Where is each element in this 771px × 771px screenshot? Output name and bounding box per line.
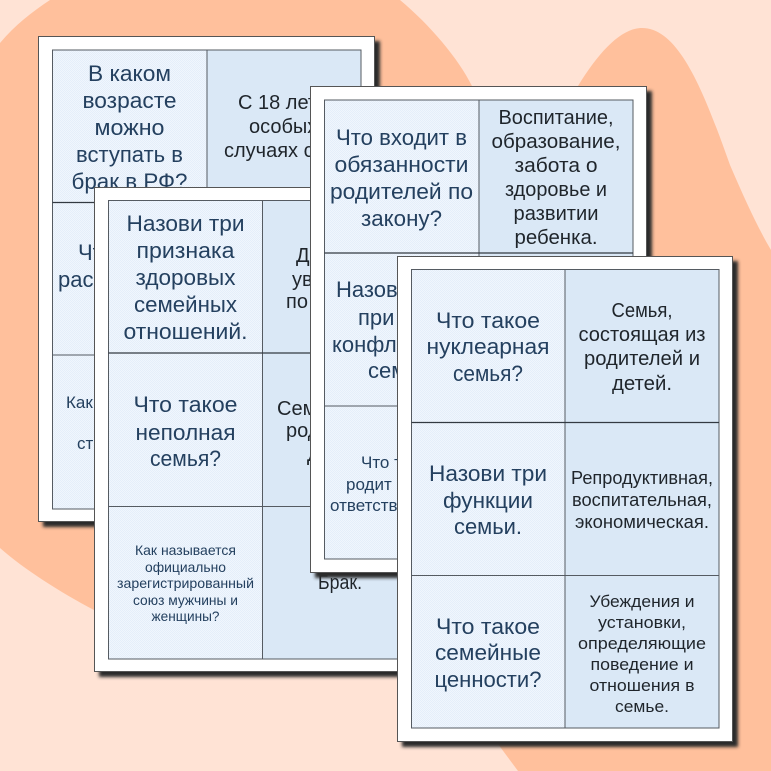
answer: family values [578,592,706,716]
answer: single-parent family: род [286,420,320,442]
question: parental duties: закону? [361,206,442,231]
answer: three signs: Д [296,245,310,267]
answer: parental duties: ребенка. [514,227,598,249]
question: family functions: семьи. [454,514,522,539]
partly hidden question, row 3: Что т [361,453,402,472]
partly hidden question, row 2 [58,240,103,292]
question: three signs [124,211,248,344]
answer: single-parent family [277,398,321,466]
question: three signs: здоровых [136,265,236,290]
answer: parental duties: забота о [514,155,598,177]
answer: family functions: воспитательная, [572,490,712,510]
partly hidden question, row 2: Чт [78,240,103,265]
answer: nuclear family [578,300,706,395]
question: registered union [117,542,254,624]
question: single-parent family: неполная [136,420,236,445]
answer: three signs [286,245,313,313]
question: family values: Что такое [436,614,540,639]
answer: family functions: экономическая. [575,512,709,532]
question: single-parent family [134,392,238,471]
answer: marriage age: особых [249,116,317,138]
question: registered union: Как называется [135,542,236,558]
sheet 3: parental duties card [310,86,652,578]
question: parental duties [330,125,473,231]
question: parental duties: Что входит в [336,125,467,150]
partly hidden question, row 2 [332,277,406,383]
answer: family values: отношения в [590,676,694,695]
answer: single-parent family: Д [307,444,321,466]
question: family values: семейные [435,640,541,665]
answer: three signs: ув [292,269,313,291]
partly hidden question, row 2: рас [58,267,93,292]
question: family functions: Назови три [429,461,547,486]
partly hidden question, row 2: при [358,305,394,330]
answer: family values: установки, [598,613,686,632]
question: marriage age: В каком [88,61,171,86]
answer: marriage age: случаях с [224,140,314,162]
sheet 2: healthy relationships card [94,188,436,677]
question: single-parent family: Что такое [134,392,238,417]
question: nuclear family: нуклеарная [426,334,550,359]
answer: family values: определяющие [578,634,706,653]
question: three signs: семейных [134,292,237,317]
question: three signs: отношений. [124,319,248,344]
question: nuclear family [426,308,550,386]
question: registered union: женщины? [152,608,220,624]
answer: parental duties: Воспитание, [498,107,614,129]
answer: parental duties: здоровье и [505,179,607,201]
answer: family functions: Репродуктивная, [571,468,713,488]
question: marriage age: можно [94,115,164,140]
question: registered union: официально [145,559,226,575]
question: family functions [429,461,547,539]
partly hidden question, row 3: родит [346,475,392,494]
question: parental duties: обязанности [334,152,468,177]
answer: marriage age [224,92,317,162]
answer: parental duties [492,107,620,249]
answer: marriage age: С 18 лет [238,92,317,114]
question: nuclear family: семья? [453,361,523,386]
answer: three signs: по [286,291,308,313]
answer: single-parent family: Сем [277,398,316,420]
partly hidden question, row 3: ответств [330,496,398,515]
partly hidden question, row 2: конфл [332,332,397,357]
partly hidden question, row 3: Как [66,393,93,412]
question: family functions: функции [443,488,533,513]
question: nuclear family: Что такое [436,308,540,333]
partly hidden question, row 3: ст [77,434,94,453]
answer: nuclear family: детей. [612,373,672,395]
partly hidden question, row 2: сем [368,358,406,383]
question: three signs: Назови три [126,211,244,236]
answer: nuclear family: родителей и [584,348,700,370]
question: marriage age: вступать в [76,142,183,167]
sheet 4: nuclear family card [398,256,738,747]
answer: nuclear family: Семья, [612,300,672,322]
answer: family functions [571,468,713,532]
answer: family values: поведение и [590,655,694,674]
answer: registered union: Брак. [318,572,362,594]
partly hidden question, row 3 [66,393,94,453]
answer: parental duties: развитии [514,203,598,225]
question: three signs: признака [136,238,235,263]
partly hidden question, row 2: Назов [336,277,398,302]
answer: family values: семье. [615,697,669,716]
answer: family values: Убеждения и [590,592,694,611]
answer: parental duties: образование, [492,131,620,153]
sheet 1: marriage age card [38,36,380,527]
question: marriage age: возрасте [82,88,176,113]
question: parental duties: родителей по [330,179,473,204]
question: registered union: зарегистрированный [117,575,254,591]
question: family values: ценности? [434,667,542,692]
partly hidden question, row 3 [330,453,402,515]
question: registered union: союз мужчины и [133,592,238,608]
question: marriage age [72,61,188,194]
question: single-parent family: семья? [150,446,221,471]
question: marriage age: брак в РФ? [72,169,188,194]
question: family values [434,614,542,692]
answer: nuclear family: состоящая из [578,324,706,346]
